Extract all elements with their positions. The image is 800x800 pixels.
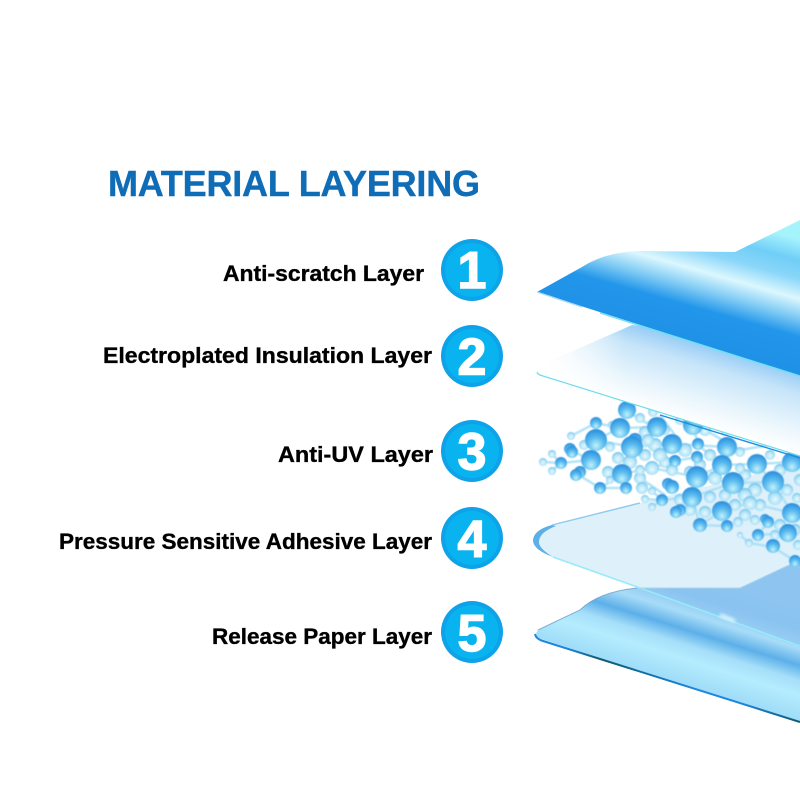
- label: layer 5: Release Paper Layer: [212, 624, 432, 649]
- number badge 4: [441, 507, 503, 569]
- layer 1: anti-scratch sheet: [537, 220, 800, 376]
- number badge 3: 3: [458, 424, 486, 482]
- layer 2: electroplated insulation sheet: [537, 325, 800, 458]
- label: layer 4: Pressure Sensitive Adhesive Layer: [59, 529, 432, 554]
- number badge 3: [441, 420, 503, 482]
- title: MATERIAL LAYERING: [108, 163, 480, 204]
- layer 4: pressure sensitive adhesive sheet: [533, 463, 800, 647]
- layer 3: anti-UV molecules: [539, 401, 800, 567]
- number badge 4: 4: [458, 511, 487, 569]
- number badge 5: [441, 601, 503, 663]
- label: layer 2: Electroplated Insulation Layer: [103, 343, 432, 368]
- number badge 2: [441, 325, 503, 387]
- number badge 5: 5: [458, 605, 486, 663]
- number badge 1: 1: [458, 242, 486, 300]
- label: layer 3: Anti-UV Layer: [278, 442, 433, 467]
- number badge 1: [441, 239, 503, 301]
- layer 5: release paper sheet: [535, 560, 800, 722]
- number badge 2: 2: [458, 328, 486, 386]
- label: layer 1: Anti-scratch Layer: [223, 261, 424, 286]
